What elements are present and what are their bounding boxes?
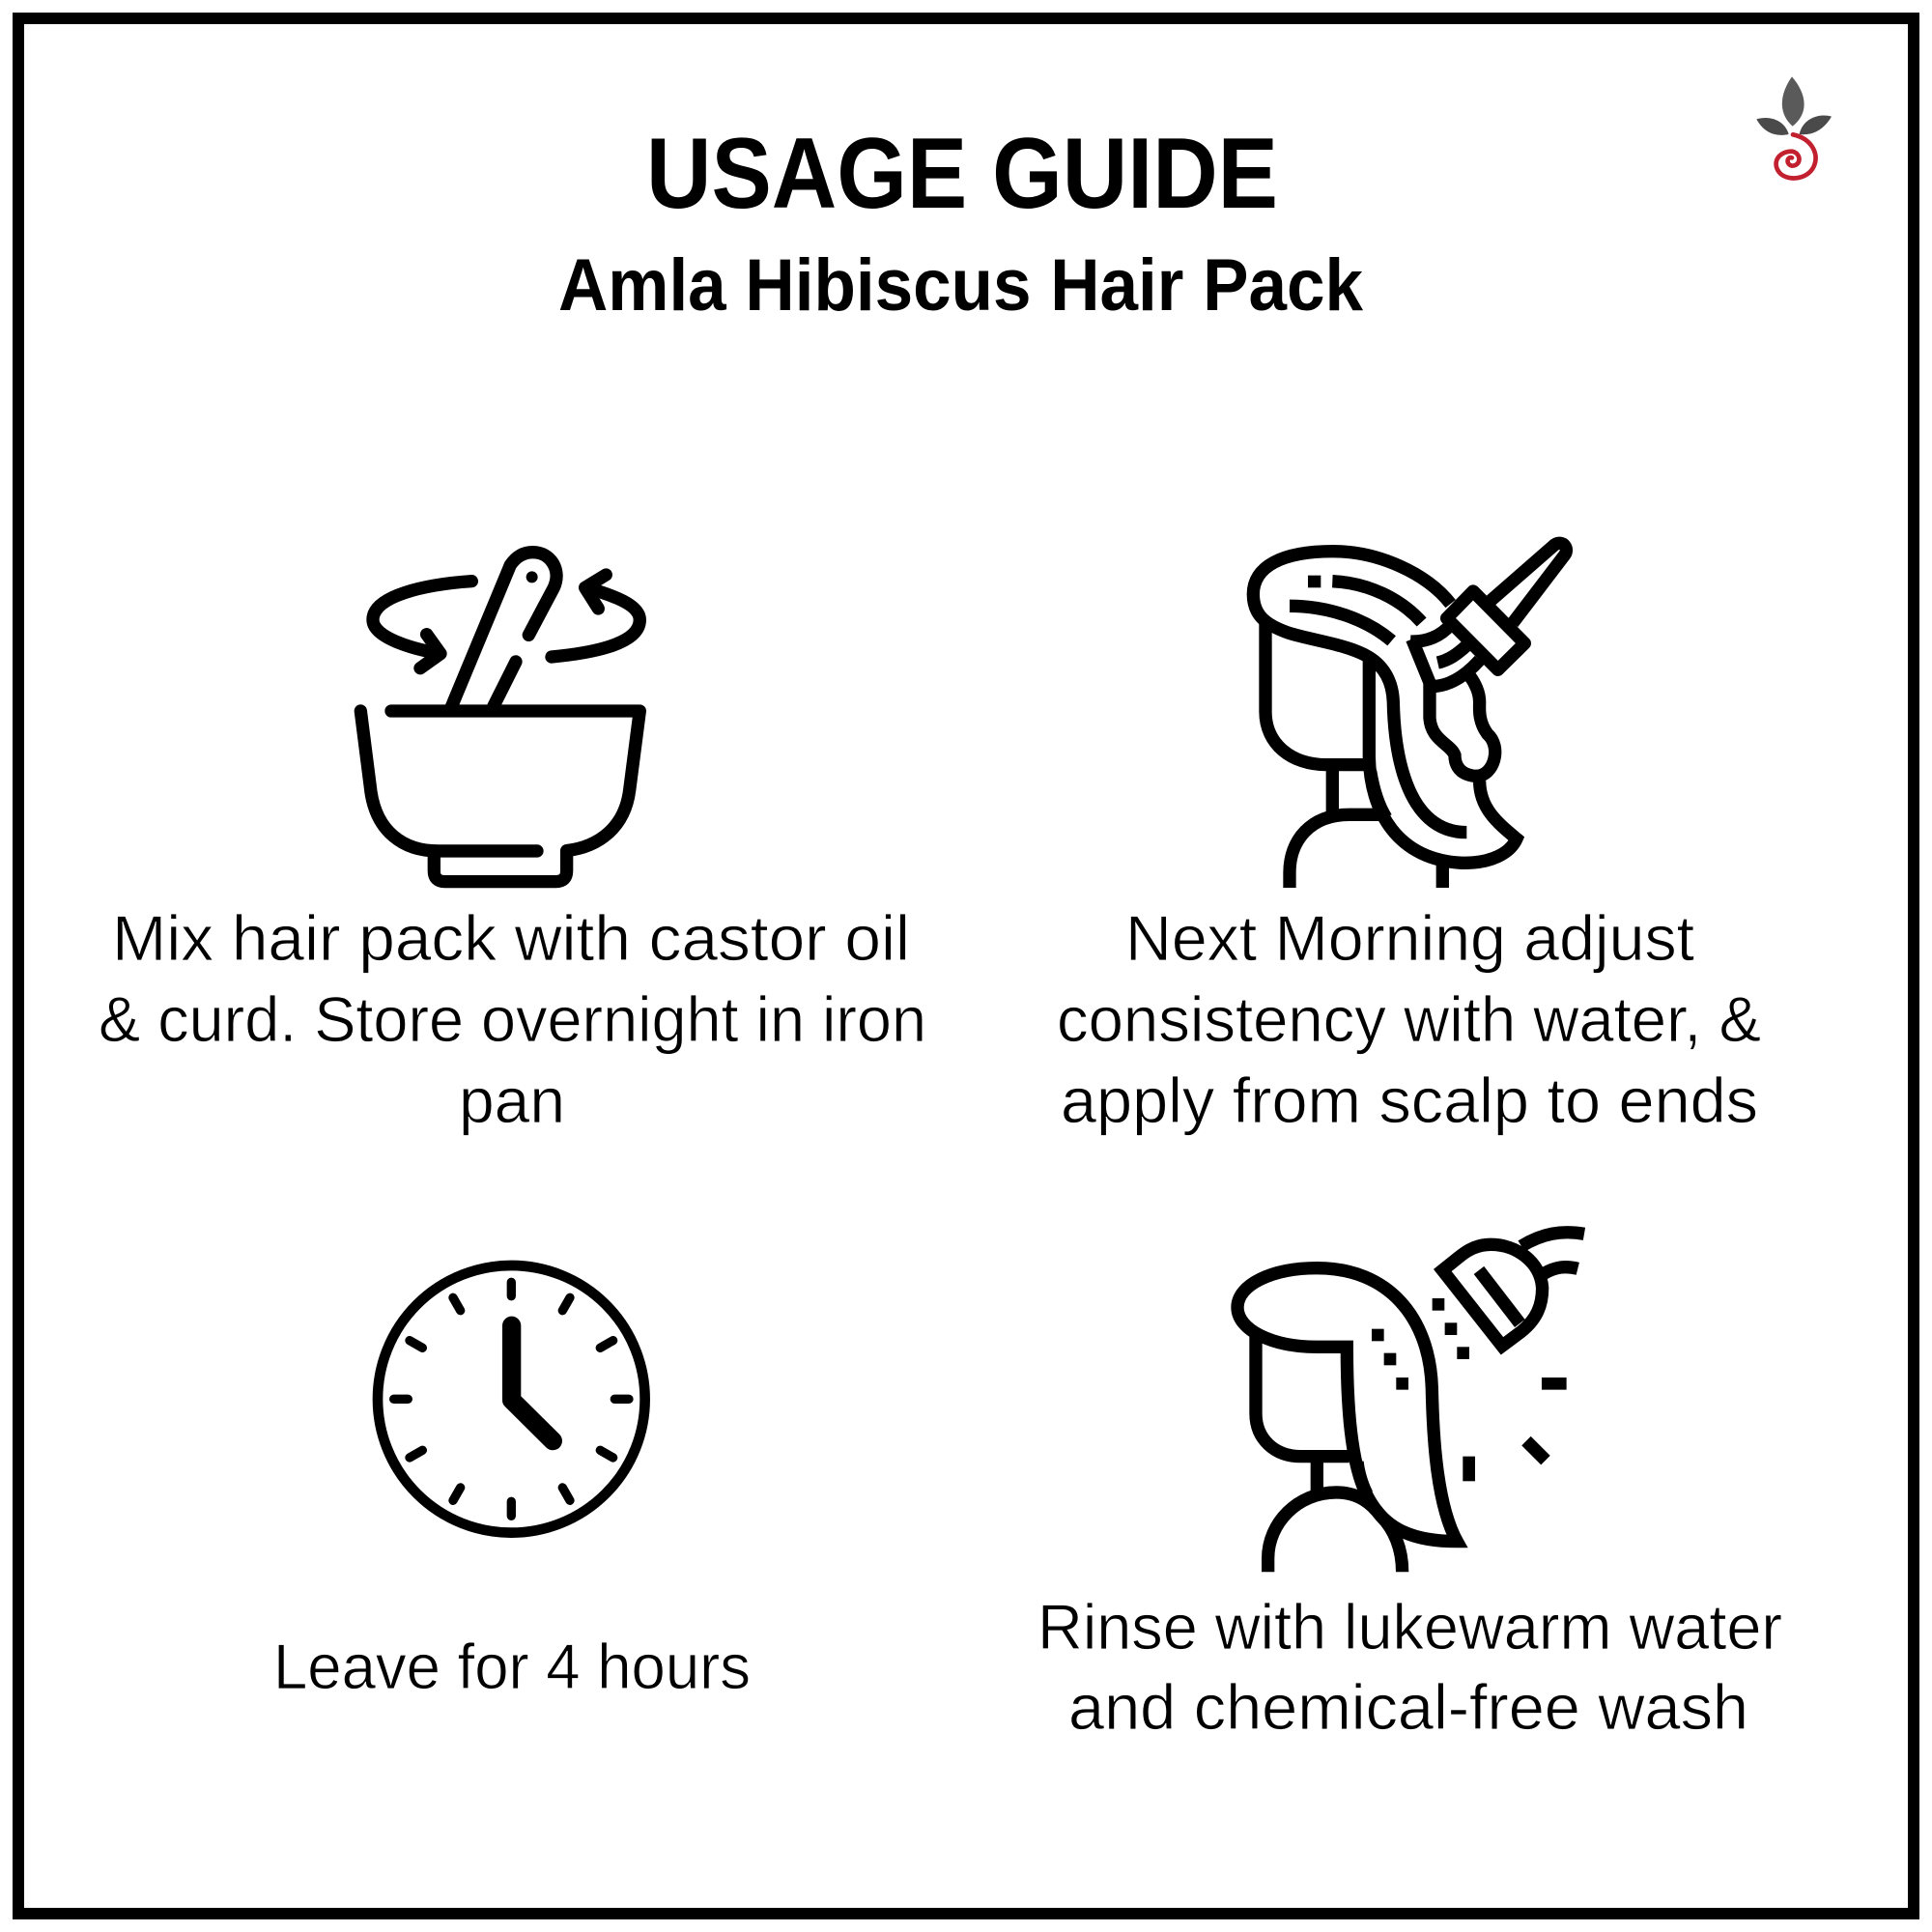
text: step 2: Next Morning adjust	[1125, 902, 1694, 974]
text: step 1: pan	[459, 1065, 565, 1136]
icon: clock	[378, 1265, 645, 1533]
title: USAGE GUIDE	[646, 118, 1278, 230]
text: step 4: Rinse with lukewarm water	[1037, 1591, 1782, 1662]
panel: step 3 leave	[273, 1265, 751, 1702]
icon: mortar bowl and pestle with stir arrows	[360, 553, 639, 882]
panel: step 2 apply	[1057, 543, 1761, 1136]
icon: head with hair applicator	[1253, 543, 1566, 888]
panel: step 1 mix	[99, 553, 926, 1136]
icon: head under shower	[1237, 1233, 1584, 1572]
text: step 1: & curd. Store overnight in iron	[99, 983, 926, 1055]
subtitle: Amla Hibiscus Hair Pack	[558, 244, 1364, 327]
text: step 4: and chemical-free wash	[1068, 1671, 1748, 1743]
text: step 4	[1037, 1591, 1782, 1743]
logo: leaves and red spiral	[1756, 76, 1832, 178]
text: step 2	[1057, 902, 1761, 1136]
text: step 1: Mix hair pack with castor oil	[112, 902, 910, 974]
text: step 1	[99, 902, 926, 1136]
text: step 2: consistency with water, &	[1057, 983, 1761, 1055]
panel: step 4 rinse	[1037, 1233, 1782, 1743]
text: step 3: Leave for 4 hours	[273, 1631, 751, 1702]
text: step 2: apply from scalp to ends	[1061, 1065, 1758, 1136]
